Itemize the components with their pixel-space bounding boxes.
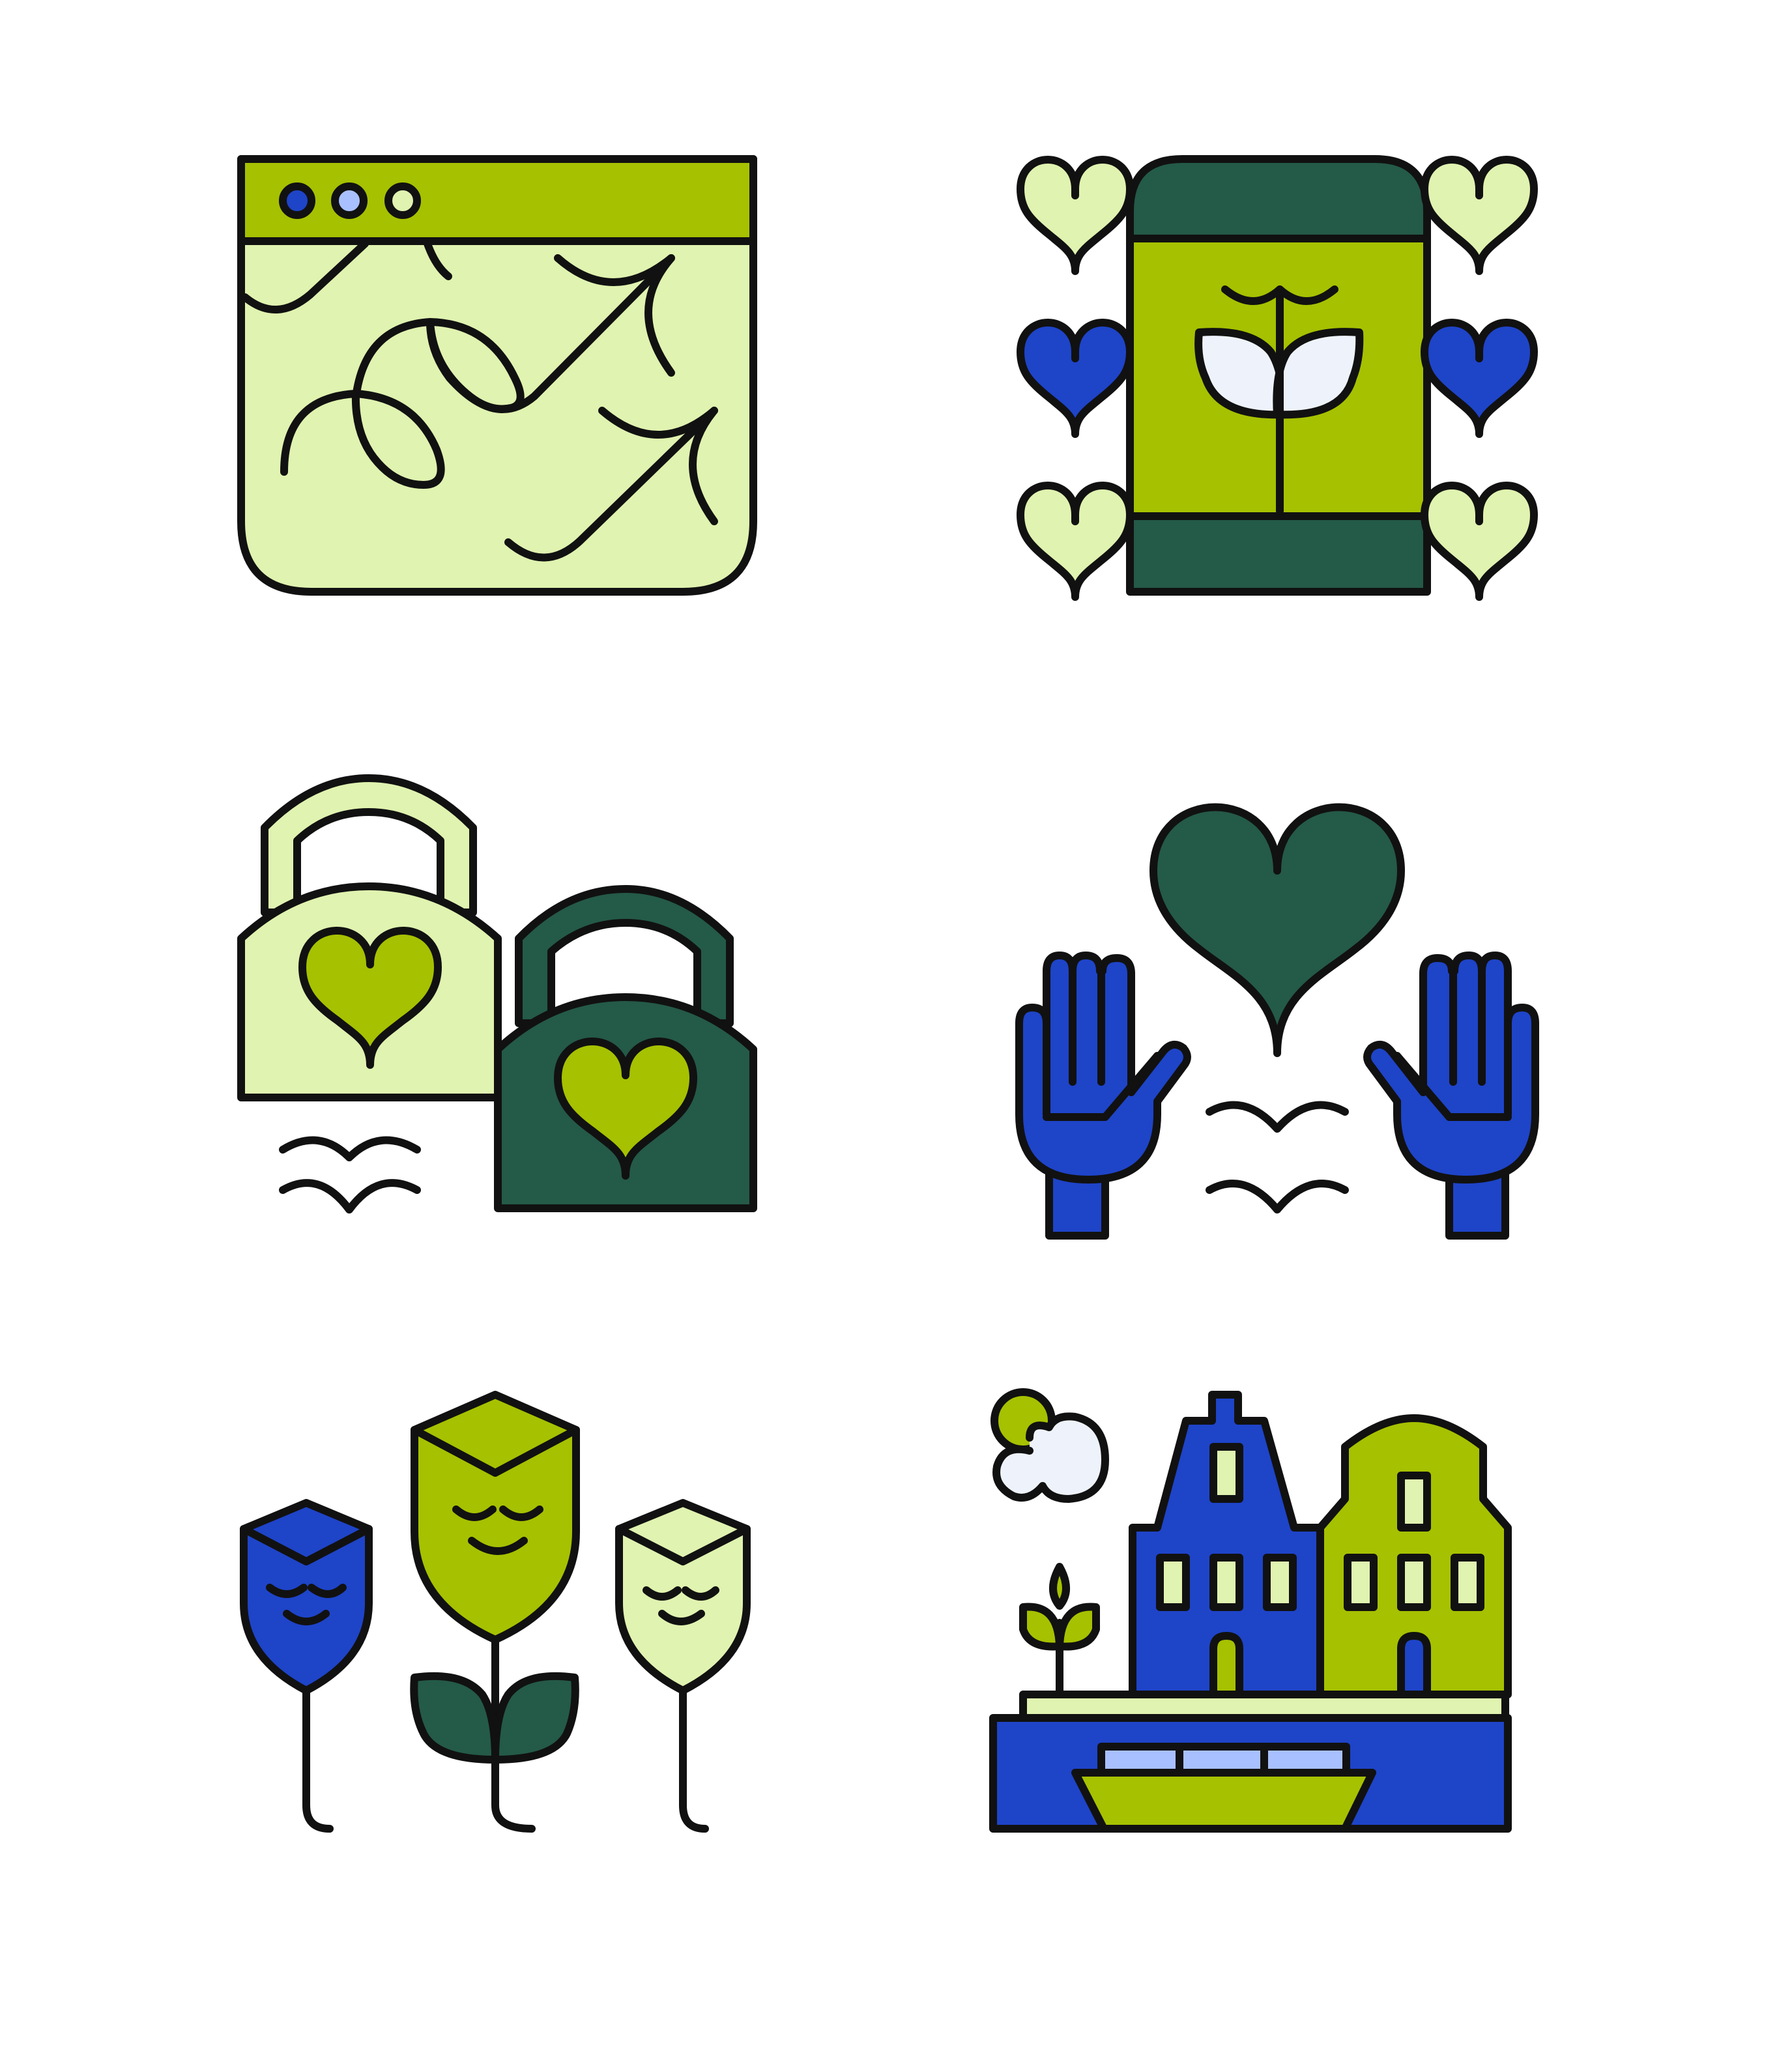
icon: city canal scene: [993, 1392, 1508, 1829]
icon: phone with plant and hearts: [1020, 159, 1534, 597]
icon: three tulips: [244, 1395, 747, 1829]
icon: two padlocks with hearts: [241, 778, 753, 1210]
hearts: [1020, 160, 1534, 597]
icon: hands and heart: [1019, 807, 1535, 1236]
icon: browser window with arrows: [241, 159, 753, 592]
plant: [1198, 289, 1359, 511]
